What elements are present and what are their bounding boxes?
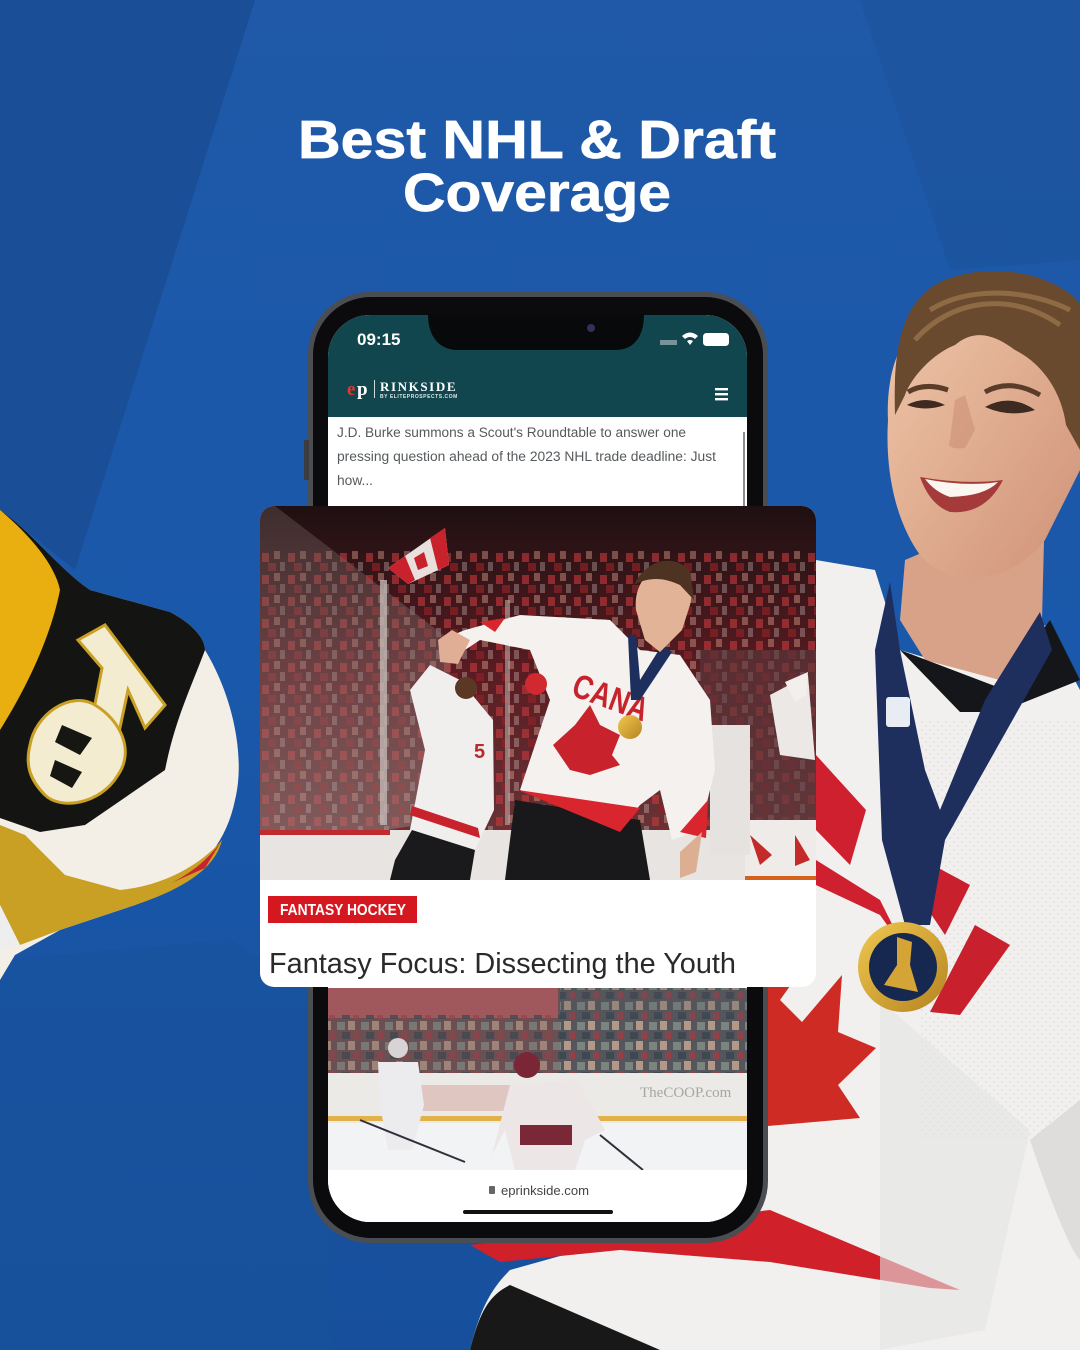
notch bbox=[428, 315, 644, 350]
teammate number 5 bbox=[390, 665, 494, 880]
smile bbox=[920, 477, 1003, 512]
category tag bbox=[268, 896, 417, 923]
status time: 09:15 bbox=[357, 330, 400, 349]
lower article photo bbox=[328, 988, 747, 1170]
rinkside logo: RINKSIDE bbox=[380, 379, 457, 394]
player left: black and gold sleeve number 81 bbox=[0, 510, 239, 980]
lower article photo: TheCOOP.com bbox=[640, 1085, 732, 1101]
title: Coverage bbox=[403, 163, 671, 223]
app header bbox=[328, 315, 747, 417]
status icons bbox=[660, 332, 729, 346]
teammate number 5: 5 bbox=[474, 741, 485, 763]
url bar bbox=[328, 1170, 747, 1222]
rinkside logo bbox=[348, 380, 457, 399]
article excerpt: how... bbox=[337, 473, 373, 488]
rinkside logo: BY ELITEPROSPECTS.COM bbox=[380, 394, 458, 400]
hair bbox=[895, 271, 1080, 450]
jersey letters bbox=[816, 755, 866, 865]
jersey number 81 bbox=[28, 625, 165, 803]
eyes bbox=[907, 400, 1035, 413]
title: Best NHL & Draft bbox=[298, 110, 776, 170]
celebrating player bbox=[438, 561, 715, 880]
menu icon bbox=[715, 388, 728, 400]
red maple leaf bbox=[768, 958, 876, 1126]
card photo bbox=[260, 506, 816, 880]
canadian flag bbox=[388, 528, 449, 584]
article excerpt bbox=[337, 425, 716, 488]
category tag: FANTASY HOCKEY bbox=[280, 902, 406, 919]
url bar: eprinkside.com bbox=[501, 1183, 589, 1198]
rinkside logo: e bbox=[347, 379, 355, 400]
phone bbox=[304, 292, 768, 1243]
article excerpt: pressing question ahead of the 2023 NHL trade deadline: Just bbox=[337, 449, 716, 464]
player right: neck and head bbox=[887, 271, 1080, 712]
rinkside logo: p bbox=[357, 379, 368, 400]
article excerpt: J.D. Burke summons a Scout's Roundtable to answer one bbox=[337, 425, 686, 440]
celebrating player: CANA bbox=[567, 667, 654, 729]
hockey players bbox=[378, 1062, 424, 1121]
medal and ribbon bbox=[858, 582, 1052, 1012]
player right: jersey bbox=[470, 560, 1080, 1350]
rink boards bbox=[260, 830, 745, 880]
article card bbox=[260, 506, 816, 987]
phone body bbox=[308, 292, 768, 1243]
card headline: Fantasy Focus: Dissecting the Youth bbox=[269, 948, 736, 980]
title bbox=[298, 110, 776, 223]
phone screen bbox=[328, 315, 747, 1222]
